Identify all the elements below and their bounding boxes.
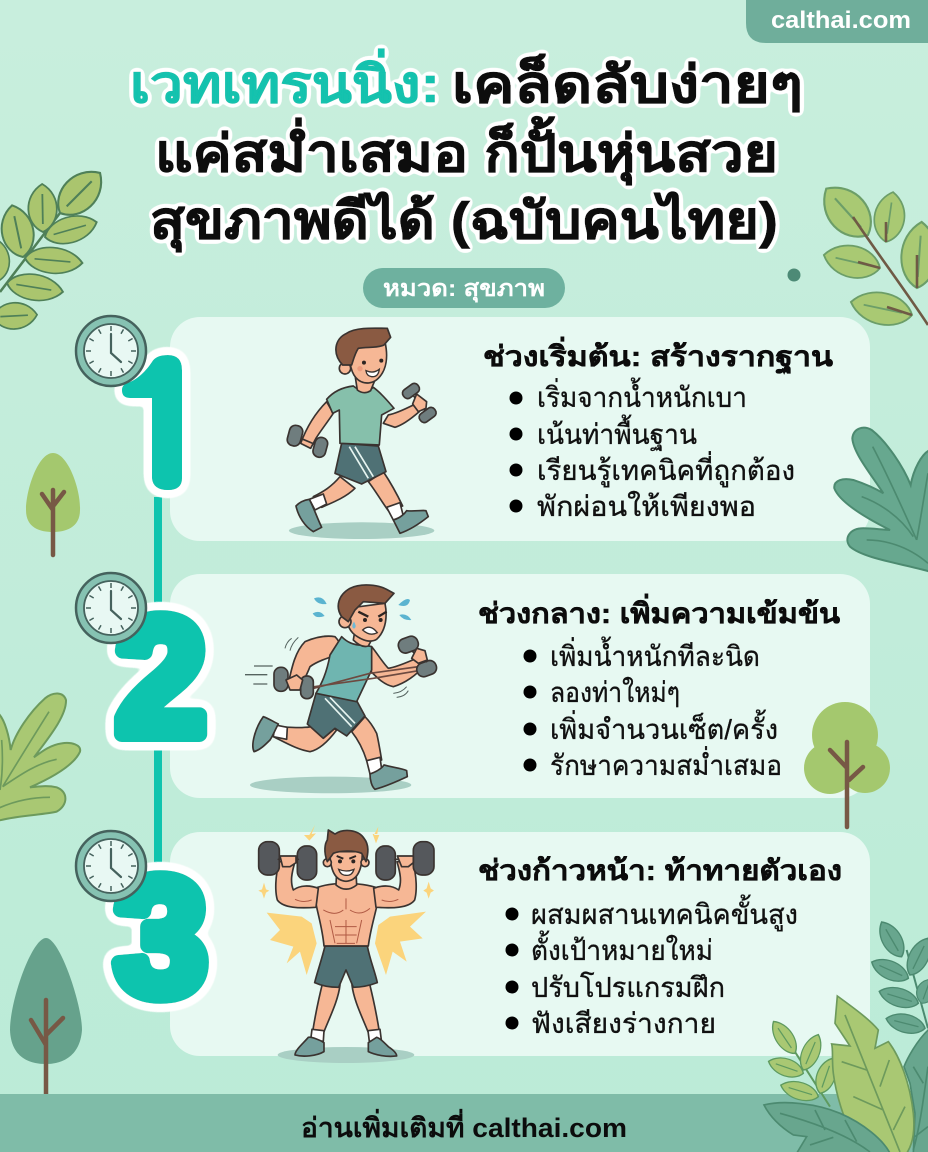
top right site tag: calthai.com bbox=[771, 7, 911, 34]
bullet list: ฟังเสียงร่างกาย bbox=[531, 1008, 716, 1039]
clock 2 bbox=[76, 573, 146, 643]
leaf left bbox=[0, 694, 80, 821]
panel: step 1 bbox=[170, 317, 870, 541]
heading: ช่วงก้าวหน้า: ท้าทายตัวเอง bbox=[478, 855, 842, 886]
bullet list: เพิ่มน้ำหนักทีละนิด bbox=[550, 636, 760, 672]
number 1: 1 bbox=[112, 313, 188, 532]
bullet list: พักผ่อนให้เพียงพอ bbox=[537, 490, 756, 522]
panel: step 2 bbox=[170, 574, 870, 798]
top right site tag bbox=[746, 0, 928, 43]
title: เวทเทรนนิ่ง: bbox=[130, 49, 440, 113]
heading: ช่วงกลาง: เพิ่มความเข้มข้น bbox=[478, 593, 840, 629]
footer bar: อ่านเพิ่มเติมที่ calthai.com bbox=[301, 1108, 627, 1143]
bullet list bbox=[506, 894, 798, 1039]
category pill: หมวด: สุขภาพ bbox=[383, 275, 545, 303]
illustration: man running with dumbbells and band bbox=[245, 585, 438, 793]
bullet list bbox=[524, 636, 782, 781]
title bbox=[130, 49, 803, 253]
bullet list bbox=[510, 377, 795, 522]
clock 1 bbox=[76, 316, 146, 386]
timeline connector bbox=[154, 497, 162, 880]
number 3: 3 bbox=[115, 845, 207, 1030]
bullet list: เรียนรู้เทคนิคที่ถูกต้อง bbox=[537, 451, 795, 488]
category pill bbox=[363, 268, 565, 308]
title: แค่สม่ำเสมอ ก็ปั้นหุ่นสวย bbox=[155, 116, 778, 186]
title: สุขภาพดีได้ (ฉบับคนไทย) bbox=[150, 191, 778, 253]
illustration: man walking with dumbbells bbox=[286, 328, 438, 539]
footer bar bbox=[0, 1094, 928, 1152]
tree bottom left bbox=[10, 938, 82, 1095]
bullet list: ลองท่าใหม่ๆ bbox=[550, 676, 680, 708]
bullet list: ตั้งเป้าหมายใหม่ bbox=[531, 930, 713, 966]
branch top left bbox=[0, 161, 112, 330]
panel: step 3 bbox=[170, 825, 870, 1063]
number 2: 2 bbox=[116, 585, 206, 770]
bullet list: ผสมผสานเทคนิคขั้นสูง bbox=[531, 894, 798, 932]
branch top right bbox=[812, 176, 928, 330]
illustration: muscular man lifting dumbbells bbox=[258, 825, 434, 1063]
bullet list: ปรับโปรแกรมฝึก bbox=[531, 971, 725, 1003]
dot bbox=[788, 268, 800, 282]
bullet list: เพิ่มจำนวนเซ็ต/ครั้ง bbox=[550, 709, 778, 745]
bullet list: เริ่มจากน้ำหนักเบา bbox=[537, 377, 747, 413]
heading: ช่วงเริ่มต้น: สร้างรากฐาน bbox=[483, 336, 833, 375]
bullet list: รักษาความสม่ำเสมอ bbox=[550, 746, 782, 781]
bullet list: เน้นท่าพื้นฐาน bbox=[537, 414, 697, 451]
foliage bottom right bbox=[764, 917, 928, 1152]
title: เคล็ดลับง่ายๆ bbox=[452, 54, 803, 113]
large leaf right bbox=[834, 428, 928, 572]
tree right bbox=[804, 702, 890, 827]
tree left small bbox=[26, 453, 80, 555]
clock 3 bbox=[76, 831, 146, 901]
